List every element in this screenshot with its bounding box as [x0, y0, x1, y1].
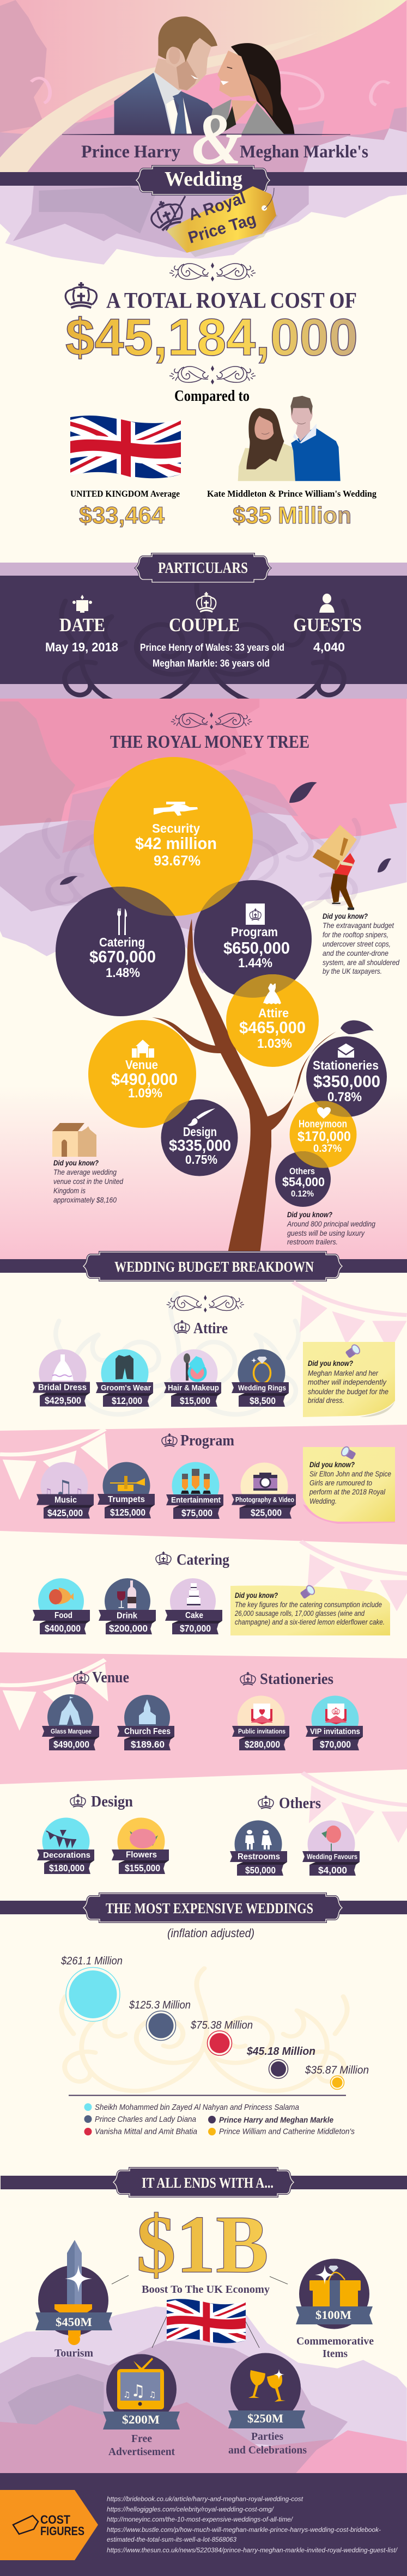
band backgrounds: [0, 563, 407, 699]
panel: the royal money tree: [0, 699, 407, 1259]
bubble: security: [94, 757, 253, 916]
item: tourism: [35, 2240, 112, 2359]
callout: venue did you know: approximately $8,160: [53, 1196, 117, 1204]
bubble: venue: [88, 1020, 196, 1128]
item: entertainment: [166, 1462, 223, 1519]
sticky note: catering: The key figures for the catering consumption include: [235, 1601, 382, 1609]
bubble: program: 1.44%: [238, 956, 272, 970]
bubble: stationeries: Stationeries: [313, 1058, 379, 1072]
item: tourism: Tourism: [54, 2347, 93, 2359]
bubble: design: 0.75%: [185, 1152, 217, 1167]
item: free advertisement: [103, 2354, 180, 2458]
callout: security did you know: The extravagant budget: [323, 921, 394, 930]
item: drink: [99, 1578, 156, 1634]
sources: http://moneyinc.com/the-10-most-expensive-weddings-of-all-time/: [107, 2516, 294, 2523]
bubble: honeymoon: Honeymoon: [299, 1119, 347, 1130]
sticky note: attire: Did you know?: [308, 1359, 353, 1368]
bubble: Mittal and Bhatia: [190, 2019, 253, 2055]
plaque: Wedding: Wedding: [165, 168, 242, 191]
sticky note: attire: Meghan Markel and her: [308, 1369, 378, 1377]
label: UK average: UNITED KINGDOM Average: [70, 489, 180, 499]
panel: most expensive weddings: [0, 1894, 407, 2136]
item: commemorative items: [296, 2259, 374, 2360]
item: church fees: $189.60: [131, 1739, 165, 1750]
item: hair and makeup: [164, 1350, 221, 1407]
watermark flourish: [45, 792, 359, 913]
legend: Prince Harry and Meghan Markle: [219, 2115, 333, 2125]
heading: a total royal cost of: A TOTAL ROYAL COST OF: [106, 288, 357, 313]
heading: attire: [174, 1320, 228, 1337]
item: music: [37, 1462, 94, 1518]
watermark flourish: [62, 570, 347, 705]
heading: catering: [156, 1552, 229, 1568]
item: wedding favours: [302, 1820, 360, 1876]
item: cake: $70,000: [180, 1623, 211, 1634]
item: trumpets: Trumpets: [108, 1495, 145, 1504]
band: [0, 1901, 407, 1914]
heading: venue: [74, 1669, 129, 1686]
item: public invitations: $280,000: [245, 1739, 280, 1750]
item: wedding rings: Wedding Rings: [238, 1383, 286, 1392]
pink band: program: [0, 1425, 407, 1545]
heading: design: [70, 1793, 133, 1810]
legend: Sheikh Mohammed bin Zayed Al Nahyan and Princess Salama: [95, 2103, 299, 2112]
callout: restroom did you know: guests will be using luxury: [287, 1229, 365, 1237]
bubble: Charles and Diana: [129, 1999, 191, 2040]
panel: header illustration: [0, 0, 407, 265]
bunting: catering: [301, 1541, 407, 1611]
bubble: design: [161, 1099, 238, 1176]
figure: UK average: $33,464: [79, 502, 165, 529]
bubble: attire: [226, 974, 319, 1067]
divider line under portrait: [62, 134, 350, 135]
bubble: Harry and Meghan: [246, 2046, 315, 2078]
bubble: venue: 1.09%: [128, 1086, 162, 1101]
icon: palace: [72, 595, 92, 613]
item: decorations: $180,000: [49, 1863, 84, 1873]
band: Wedding: [0, 172, 407, 186]
icon: guest: [319, 594, 335, 613]
heading: venue: Venue: [92, 1669, 129, 1686]
heading: design: Design: [91, 1793, 133, 1810]
title: Prince Harry: Prince Harry: [81, 142, 180, 162]
item: glass marquee: Glass Marquee: [51, 1729, 92, 1735]
callout: security did you know: for the rooftop snipers,: [323, 931, 388, 939]
item: commemorative items: $100M: [315, 2308, 351, 2322]
sources: estimated-the-total-sum-its-well-a-lot-8568063: [107, 2536, 236, 2543]
sticky note: attire: [303, 1342, 395, 1417]
heading: date: DATE: [59, 614, 105, 636]
icon: brush: [187, 1108, 215, 1126]
item: glass marquee: [42, 1694, 99, 1750]
callout: security did you know: system, are all shouldered: [323, 959, 399, 967]
value: date: May 19, 2018: [45, 640, 118, 654]
figure: 1B: $1B: [136, 2199, 269, 2290]
pink band: venue and stationeries: [0, 1652, 407, 1784]
tree: [152, 919, 336, 1253]
sticky note: program: Wedding.: [309, 1497, 337, 1505]
illustration: Harry and Meghan: [114, 16, 294, 134]
callout: security did you know: Did you know?: [323, 912, 368, 920]
figure: total cost: $45,184,000: [65, 308, 358, 367]
item: cake: Cake: [185, 1611, 203, 1620]
ornament: [169, 365, 256, 384]
bunting: others: [302, 1773, 407, 1843]
bubble: Mittal and Bhatia: $75.38 Million: [190, 2019, 253, 2031]
bubble: catering: $670,000: [89, 947, 156, 966]
callout: venue did you know: [53, 1159, 123, 1204]
bubble: others: $54,000: [282, 1175, 325, 1189]
sources: https://hellogiggles.com/celebrity/royal-wedding-cost-omg/: [107, 2505, 275, 2513]
bubble: catering: Catering: [99, 935, 145, 949]
bubble: others: 0.12%: [291, 1189, 314, 1199]
item: groom's wear: Groom's Wear: [101, 1384, 151, 1393]
leaves: [60, 782, 391, 1034]
logo: cost figures: COST: [40, 2513, 70, 2526]
sticky note: catering: [230, 1584, 390, 1635]
callout: venue did you know: The average wedding: [53, 1168, 117, 1176]
icon: dress: [263, 984, 281, 1004]
callout: restroom did you know: Around 800 principal wedding: [287, 1220, 375, 1228]
icon: cutlery: [117, 908, 127, 935]
sticky note: program: perform at the 2018 Royal: [309, 1488, 386, 1496]
item: wedding rings: $8,500: [250, 1395, 276, 1406]
bubble: Sheikh Mohammed: [60, 1955, 123, 2022]
bubble: program: [194, 880, 312, 998]
bubble: William and Catherine: $35.87 Million: [305, 2064, 369, 2076]
bubble: security: 93.67%: [154, 852, 201, 869]
sticky note: catering: 26,000 sausage rolls, 17,000 glasses (wine and: [234, 1609, 365, 1617]
item: free advertisement: $200M: [122, 2413, 160, 2426]
item: restrooms: [230, 1820, 287, 1876]
item: food: $400,000: [45, 1623, 81, 1634]
heading: guests: GUESTS: [293, 614, 362, 636]
bubble: venue: Venue: [125, 1058, 158, 1072]
icon: heart: [317, 1107, 331, 1119]
heading: others: [258, 1795, 321, 1812]
ornament: [169, 263, 256, 282]
icon: UK flag: [70, 416, 181, 478]
bunting: program: [0, 1429, 108, 1500]
callout: security did you know: undercover street cops,: [323, 940, 391, 948]
icon: envelope: [338, 1043, 354, 1058]
item: VIP invitations: $70,000: [320, 1739, 351, 1750]
dark panel: [0, 576, 407, 684]
item: music: ♫: [54, 1476, 73, 1500]
bubble: others: Others: [289, 1166, 315, 1176]
logo: cost figures: [0, 2490, 98, 2560]
item: restrooms: Restrooms: [238, 1852, 280, 1861]
icon: house: [52, 1123, 96, 1157]
ornament: [167, 1295, 244, 1313]
value: guests: 4,040: [313, 640, 345, 654]
sticky note: program: Did you know?: [309, 1461, 355, 1469]
gradient ground: [0, 1086, 407, 1259]
callout: venue did you know: Did you know?: [53, 1159, 99, 1167]
item: commemorative items: Commemorative: [296, 2335, 374, 2347]
heading: others: Others: [279, 1795, 321, 1812]
bubble: honeymoon: 0.37%: [313, 1143, 342, 1155]
sticky note: catering: champagne) and a six-tiered lemon elderflower cake.: [235, 1618, 385, 1626]
sticky note: program: Girls are rumoured to: [309, 1479, 372, 1487]
subtitle: (inflation adjusted): [167, 1926, 254, 1940]
bubble: attire: 1.03%: [257, 1036, 292, 1051]
icon: UK flag: [167, 2299, 246, 2343]
value: Prince Henry: Prince Henry of Wales: 33 years old: [140, 642, 284, 653]
item: wedding rings: [232, 1350, 289, 1407]
price tag: [166, 186, 278, 257]
callout: venue did you know: Kingdom is: [53, 1187, 86, 1195]
plaque: wedding budget breakdown: [83, 1252, 342, 1280]
logo: cost figures: FIGURES: [40, 2524, 84, 2538]
callout: restroom did you know: [287, 1211, 375, 1246]
plaque: Wedding: [136, 166, 270, 194]
panel: budget sections: [0, 1282, 407, 1876]
item: free advertisement: ♫: [131, 2382, 145, 2401]
plaque: particulars: PARTICULARS: [158, 560, 248, 577]
item: glass marquee: $490,000: [53, 1739, 89, 1750]
bubble: stationeries: 0.78%: [327, 1090, 362, 1104]
plaque: wedding budget breakdown: WEDDING BUDGET BREAKDOWN: [114, 1259, 314, 1275]
bubble: stationeries: [306, 1036, 387, 1117]
legend: [84, 2103, 355, 2136]
icon: program sheet: [246, 904, 265, 925]
sources: https://www.thesun.co.uk/news/5220384/prince-harry-meghan-markle-invited-royal-wedding-guest-list/: [107, 2547, 398, 2554]
item: entertainment: $75,000: [181, 1507, 212, 1518]
plaque: most expensive weddings: THE MOST EXPENSIVE WEDDINGS: [106, 1900, 313, 1916]
item: restrooms: $50,000: [245, 1865, 276, 1876]
item: flowers: [112, 1818, 169, 1874]
icon: tilted crown: [146, 195, 186, 233]
plaque: most expensive weddings: [83, 1894, 342, 1922]
heading: compared to: Compared to: [174, 388, 250, 405]
bubble: venue: $490,000: [111, 1070, 178, 1089]
illustration: Kate and William: [238, 396, 341, 481]
bubble: Harry and Meghan: $45.18 Million: [246, 2046, 315, 2058]
item: drink: $200,000: [109, 1623, 148, 1634]
sources: [107, 2495, 398, 2554]
bubble: Sheikh Mohammed: $261.1 Million: [60, 1955, 123, 1967]
caption: boost to the UK economy: Boost To The UK Economy: [142, 2284, 270, 2296]
sticky note: attire: shoulder the budget for the: [308, 1388, 388, 1396]
bubble: stationeries: $350,000: [313, 1072, 380, 1091]
bubble: catering: 1.48%: [106, 966, 140, 980]
heading: attire: Attire: [193, 1320, 228, 1337]
item: VIP invitations: VIP invitations: [310, 1727, 360, 1736]
legend: Prince Charles and Lady Diana: [95, 2115, 196, 2124]
sources: https://bridebook.co.uk/article/harry-and-meghan-royal-wedding-cost: [107, 2495, 303, 2503]
panel: it all ends with: [0, 2168, 407, 2473]
plaque: particulars: [136, 554, 270, 582]
item: parties and celebrations: [228, 2353, 307, 2456]
item: trumpets: $125,000: [110, 1507, 145, 1518]
watercolor background: [0, 2306, 407, 2473]
heading: couple: COUPLE: [169, 614, 240, 636]
callout: venue did you know: venue cost in the United: [53, 1177, 123, 1186]
bubble: program: $650,000: [223, 938, 290, 957]
panel: footer: [0, 2473, 407, 2576]
item: decorations: Decorations: [43, 1851, 90, 1860]
heading: the royal money tree: THE ROYAL MONEY TREE: [110, 732, 309, 752]
icon: crown: [65, 282, 96, 308]
sources: https://www.bustle.com/p/how-much-will-meghan-markle-prince-harrys-wedding-cost-bridebook-: [107, 2526, 381, 2534]
callout: restroom did you know: restroom trailers.: [287, 1238, 338, 1246]
legend: Vanisha Mittal and Amit Bhatia: [95, 2127, 197, 2136]
watercolor header background: [0, 0, 407, 265]
item: flowers: $155,000: [125, 1863, 160, 1873]
price tag: Price Tag: [186, 210, 258, 247]
bubble: attire: $465,000: [239, 1018, 306, 1037]
bubble: program: Program: [231, 925, 278, 939]
item: wedding favours: $4,000: [318, 1865, 347, 1876]
item: wedding favours: Wedding Favours: [307, 1853, 357, 1860]
bubble: attire: Attire: [258, 1006, 289, 1020]
watermark flourish: [56, 1293, 299, 1414]
connector lines: [112, 2275, 288, 2348]
item: photography and video: [232, 1463, 296, 1518]
item: groom's wear: [96, 1350, 153, 1407]
legend: Prince William and Catherine Middleton's: [219, 2127, 355, 2136]
item: parties and celebrations: Parties: [251, 2431, 283, 2443]
sticky note: attire: mother will independently: [308, 1378, 387, 1387]
bunting: attire: [293, 1282, 407, 1352]
item: free advertisement: Advertisement: [108, 2446, 175, 2458]
bubble: security: Security: [152, 821, 200, 835]
sticky note: program: Sir Elton John and the Spice: [309, 1470, 391, 1478]
heading: stationeries: Stationeries: [260, 1671, 333, 1688]
panel: total royal cost: [65, 282, 376, 529]
icon: crown: [197, 592, 216, 612]
item: parties and celebrations: $250M: [247, 2412, 283, 2425]
bubble: Charles and Diana: $125.3 Million: [129, 1999, 191, 2011]
band: wedding budget breakdown: [0, 1259, 407, 1273]
title: Meghan Markle's: Meghan Markle's: [240, 142, 368, 162]
item: tourism: $450M: [56, 2315, 92, 2329]
illustration: man carrying box: [313, 825, 357, 910]
item: flowers: Flowers: [126, 1851, 157, 1859]
callout: security did you know: by the UK taxpayers.: [323, 967, 382, 975]
callout: security did you know: and the counter-drone: [323, 949, 388, 957]
value: Meghan: Meghan Markle: 36 years old: [153, 658, 270, 669]
plaque: it all ends with: IT ALL ENDS WITH A...: [142, 2175, 274, 2191]
item: food: [33, 1578, 90, 1634]
icon: rifle: [154, 802, 198, 816]
item: decorations: [37, 1818, 94, 1874]
axis line: [69, 2095, 346, 2096]
item: photography and video: Photography & Video: [235, 1496, 294, 1504]
bubble: honeymoon: $170,000: [297, 1129, 351, 1144]
item: photography and video: $25,000: [251, 1507, 282, 1518]
item: music: ♫: [44, 1487, 52, 1498]
bubble: design: $335,000: [169, 1137, 231, 1155]
ampersand: &: [192, 99, 242, 179]
heading: catering: Catering: [177, 1552, 229, 1568]
ornament: [171, 712, 252, 729]
item: bridal dress: Bridal Dress: [38, 1383, 87, 1392]
icon: building: [132, 1040, 154, 1058]
item: free advertisement: Free: [131, 2433, 152, 2445]
label: Kate and William's wedding: Kate Middleton & Prince William's Wedding: [207, 489, 376, 499]
callout: restroom did you know: Did you know?: [287, 1211, 332, 1219]
item: VIP invitations: [306, 1696, 363, 1750]
bunting: venue: [0, 1660, 108, 1731]
watermark flourish: [62, 1968, 347, 2091]
item: free advertisement: ♫: [123, 2390, 130, 2400]
bubble chart: [60, 1955, 369, 2089]
item: public invitations: Public invitations: [238, 1729, 285, 1735]
bubble: others: [275, 1151, 331, 1207]
item: hair and makeup: $15,000: [180, 1395, 210, 1406]
item: music: $425,000: [47, 1507, 83, 1518]
plaque: it all ends with: [113, 2168, 294, 2196]
price tag: A Royal: [186, 189, 248, 224]
item: church fees: Church Fees: [124, 1727, 171, 1736]
item: cake: [165, 1578, 222, 1634]
item: trumpets: [98, 1462, 155, 1518]
bubble: William and Catherine: [305, 2064, 369, 2089]
callout: security did you know: [323, 912, 399, 975]
item: church fees: [117, 1695, 174, 1750]
item: bridal dress: [33, 1350, 90, 1406]
figure: 35 million: $35 Million: [233, 502, 351, 529]
item: parties and celebrations: and Celebrations: [228, 2444, 307, 2456]
item: bridal dress: $429,500: [45, 1395, 81, 1406]
bubble: honeymoon: [290, 1101, 356, 1168]
item: drink: Drink: [117, 1611, 137, 1621]
item: entertainment: Entertainment: [171, 1496, 221, 1505]
item: music: Music: [54, 1495, 77, 1505]
bubble: security: $42 million: [135, 834, 217, 853]
band: [1, 2176, 407, 2189]
item: groom's wear: $12,000: [112, 1395, 142, 1406]
heading: program: Program: [180, 1432, 234, 1449]
bubble: design: Design: [183, 1125, 217, 1139]
sticky note: attire: bridal dress.: [308, 1396, 344, 1405]
item: hair and makeup: Hair & Makeup: [168, 1384, 219, 1393]
item: free advertisement: ♫: [149, 2390, 156, 2400]
icon: price tag logo: [13, 2516, 38, 2534]
sticky note: catering: Did you know?: [235, 1591, 278, 1600]
sticky note: program: [303, 1445, 395, 1524]
item: commemorative items: Items: [323, 2348, 348, 2360]
bubble: catering: [56, 887, 185, 1016]
panel: particulars: [0, 554, 407, 705]
item: food: Food: [54, 1611, 72, 1620]
item: music: ♫: [74, 1487, 83, 1498]
item: public invitations: [232, 1696, 289, 1750]
watercolor background: [0, 699, 407, 974]
